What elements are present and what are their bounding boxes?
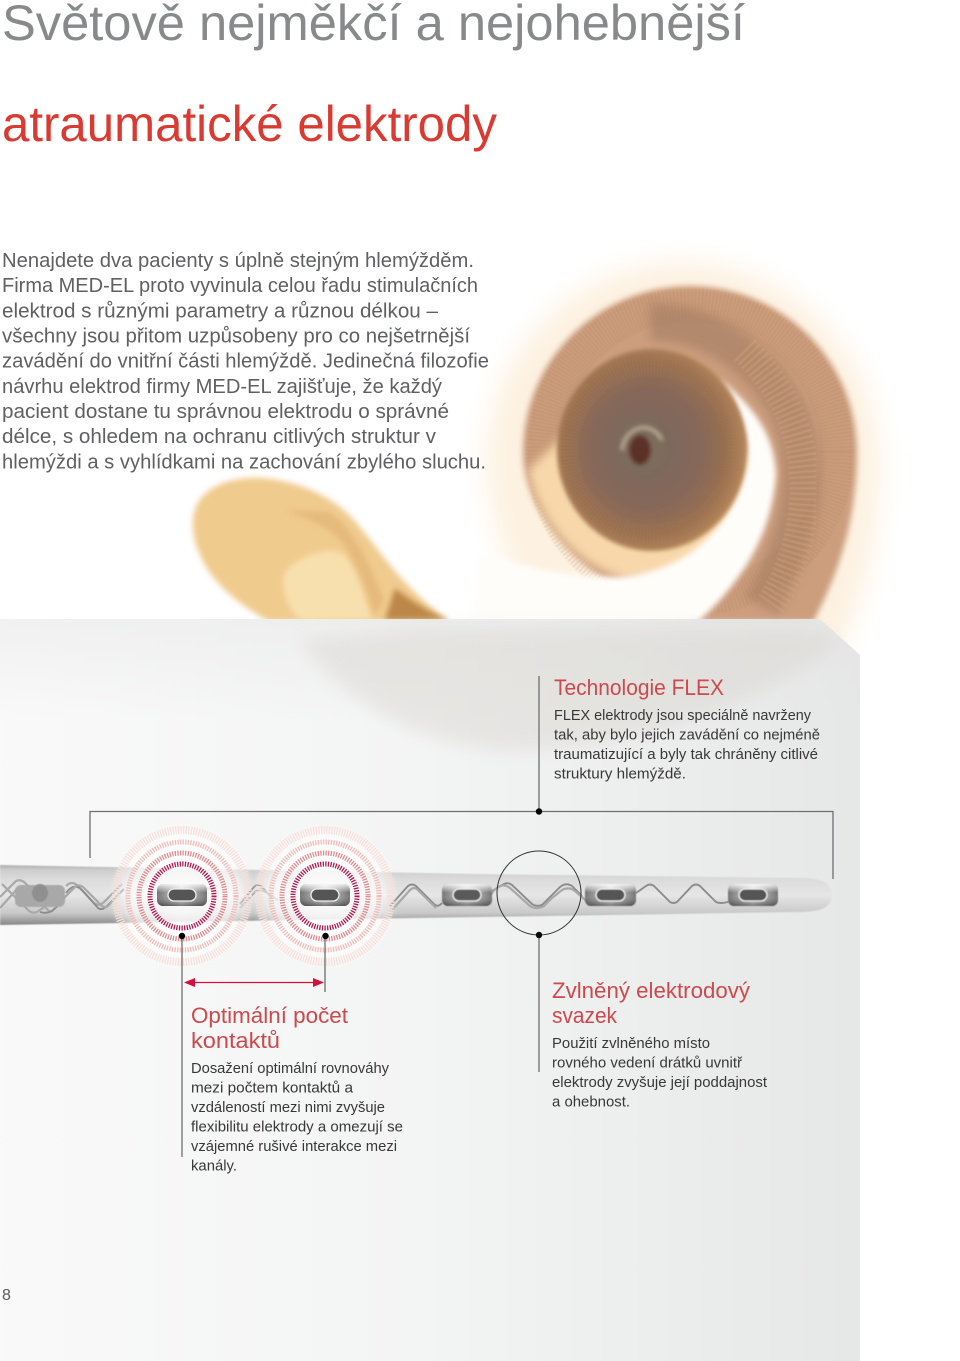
callout: Optimální počet kontaktů: Dosažení optimální rovnováhy [191,1061,390,1077]
yellow halo around the spiral [486,262,880,655]
bracket lines above the electrode [90,676,833,879]
title line 2: atraumatické elektrody [2,96,497,152]
leader lines with dots [179,932,542,1157]
intro text block: zavádění do vnitřní části hlemýždě. Jedinečná filozofie [2,350,489,372]
callout: Zvlněný elektrodový svazek: svazek [552,1003,618,1028]
callout: Optimální počet kontaktů: mezi počtem kontaktů a [191,1080,354,1096]
callout: Zvlněný elektrodový svazek: rovného vedení drátků uvnitř [552,1056,743,1072]
callout: Zvlněný elektrodový svazek: elektrody zvyšuje její poddajnost [552,1075,767,1091]
callout: Optimální počet kontaktů: kontaktů [191,1028,280,1053]
dark central disc [557,349,747,551]
intro text block [2,250,489,474]
callout: Optimální počet kontaktů: vzájemné rušivé interakce mezi [191,1139,397,1155]
stimulation rings: contact 3 [251,822,399,970]
callout: Zvlněný elektrodový svazek: Použití zvlněného místo [552,1036,710,1052]
callout: Technologie FLEX: Technologie FLEX [554,675,724,700]
swoosh of the spiral seen through the panel [300,628,840,750]
intro text block: návrhu elektrod firmy MED-EL zajišťuje, že každý [2,376,442,398]
white crescent of the spiral [470,378,775,622]
disc radial texture [568,366,736,534]
intro text block: hlemýždi a s vyhlídkami na zachování zbylého sluchu. [2,452,486,474]
callout: Zvlněný elektrodový svazek: Zvlněný elektrodový [552,978,751,1003]
callout: Technologie FLEX: struktury hlemýždě. [554,766,686,782]
intro text block: pacient dostane tu správnou elektrodu o správné [2,401,449,423]
electrode contacts [15,884,778,907]
stimulation rings: contact 2 [108,822,256,970]
background photo: cochlea spiral [193,262,880,655]
orange tail blob of the cochlea [193,478,450,622]
electrode illustration [0,822,832,970]
yellow inner band [528,420,775,580]
callout: Zvlněný elektrodový svazek [552,978,767,1110]
intro text block: Nenajdete dva pacienty s úplně stejným hlemýžděm. [2,250,474,272]
electrode tube [0,865,832,925]
wave wires [0,880,728,913]
intro text block: elektrod s různými parametry a různou délkou – [2,300,439,322]
callout: Optimální počet kontaktů: Optimální počet [191,1003,349,1028]
callout: Technologie FLEX: FLEX elektrody jsou speciálně navrženy [554,708,812,724]
panel: grey technical background with cut corner [0,619,860,1361]
intro text block: délce, s ohledem na ochranu citlivých struktur v [2,426,436,448]
arrow: contact spacing [184,978,324,987]
outer spiral ring [523,286,857,622]
callout: Technologie FLEX: traumatizující a byly tak chráněny citlivé [554,747,818,763]
callout: Zvlněný elektrodový svazek: a ohebnost. [552,1094,630,1110]
central eye of the spiral [617,419,667,475]
callout: Optimální počet kontaktů: kanály. [191,1158,237,1174]
intro text block: Firma MED-EL proto vyvinula celou řadu stimulačních [2,275,478,297]
callout: Optimální počet kontaktů: flexibilitu elektrody a omezují se [191,1120,403,1136]
callout: Optimální počet kontaktů: vzdáleností mezi nimi zvyšuje [191,1100,385,1116]
magnifier circle on the wave section [497,851,581,935]
callout: Optimální počet kontaktů [191,1003,403,1174]
page number: 8 [2,1287,11,1304]
intro text block: všechny jsou přitom uzpůsobeny pro co nejšetrnější [2,326,470,348]
callout: Technologie FLEX [554,675,820,782]
callout: Technologie FLEX: tak, aby bylo jejich zavádění co nejméně [554,728,820,744]
